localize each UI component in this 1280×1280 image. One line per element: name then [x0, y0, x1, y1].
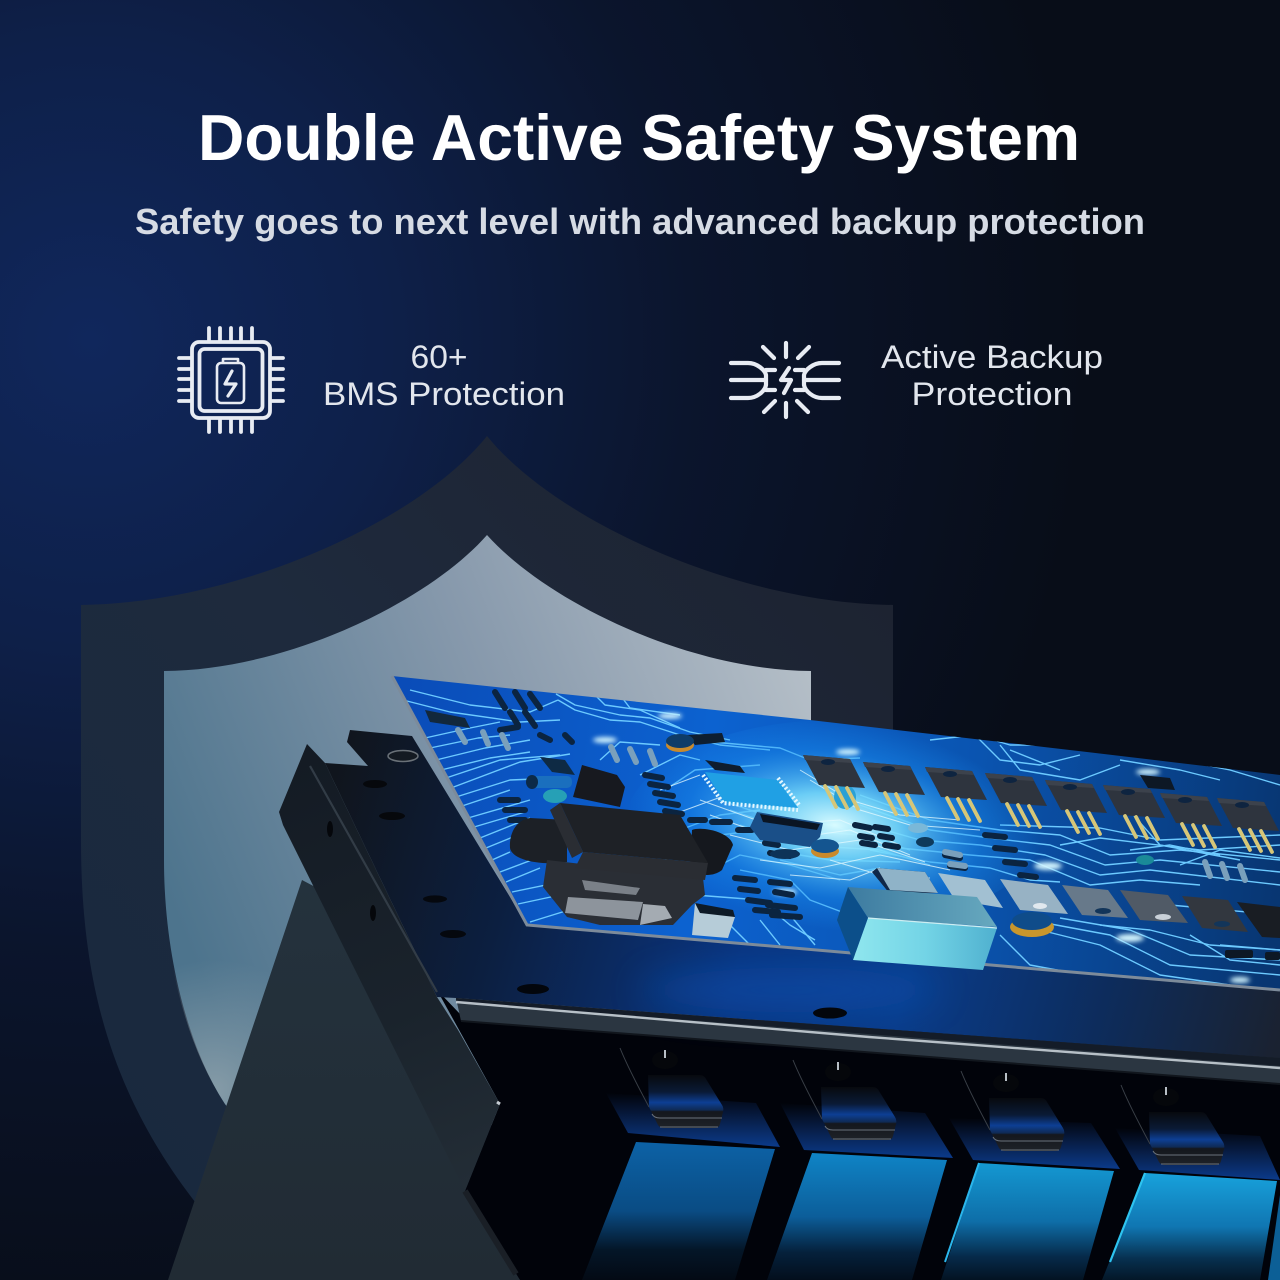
metal latch: [565, 897, 643, 920]
label: 60+ BMS Protection: BMS Protection: [323, 376, 565, 412]
blue capacitor: [526, 775, 572, 789]
white small connector: [692, 903, 735, 938]
rear block: [573, 765, 625, 807]
board traces: [403, 690, 1280, 985]
small right chips: [1140, 775, 1280, 960]
icon: spark between cables: [731, 343, 839, 417]
small dark chips: [495, 692, 1036, 917]
battery interior: [437, 990, 1280, 1280]
battery terminals: [620, 1048, 1224, 1165]
top cover: [560, 803, 708, 863]
title: Double Active Safety System: [198, 101, 1080, 174]
CPU chip: [703, 772, 800, 810]
board edge: [392, 676, 1280, 990]
circuit board: [392, 676, 1280, 990]
battery cell 5 edge: [1268, 1195, 1280, 1280]
top cover front band: [575, 852, 708, 880]
upper dark IC: [687, 733, 725, 745]
feature: BMS protection: [179, 328, 565, 432]
plate glow: [640, 968, 940, 1012]
label: Active Backup Protection: [881, 339, 1103, 412]
green capacitor: [1136, 855, 1154, 865]
battery cell 3: [941, 1118, 1120, 1280]
label: 60+ BMS Protection: 60+: [410, 339, 468, 375]
right cylinder: [690, 829, 733, 875]
icon: chip with battery: [179, 328, 283, 432]
metal bracket top plate: [325, 730, 1280, 1058]
bracket mounting holes: [363, 750, 847, 1018]
teal cap near MOSFETs: [834, 785, 856, 809]
black switch assembly: [510, 765, 733, 925]
triangular stand: [168, 880, 520, 1280]
board base: [392, 676, 1280, 990]
MOSFET row: [803, 755, 1279, 852]
shield: outer: [81, 436, 893, 1280]
central glow: [652, 730, 1028, 919]
large cyan component: [837, 887, 997, 970]
battery cell 4: [1102, 1128, 1280, 1280]
IC above CPU: [705, 760, 745, 773]
battery cell 2: [767, 1103, 953, 1280]
bracket side flange: [279, 744, 516, 1274]
heat-sink tab row: [872, 868, 1280, 938]
feature: active backup protection: [731, 339, 1103, 417]
battery cell 1: [582, 1093, 780, 1280]
bright traces over glow: [660, 770, 980, 880]
gold coil inductors: [666, 734, 1054, 937]
left cylinder: [510, 818, 567, 863]
chip block upper left: [425, 710, 470, 728]
label: Active Backup Protection: Active Backup: [881, 339, 1103, 375]
subtitle: Safety goes to next level with advanced backup protection: [135, 201, 1145, 242]
battery cells: [582, 1048, 1280, 1280]
label: Active Backup Protection: Protection: [912, 376, 1072, 412]
label: 60+ BMS Protection: [323, 339, 565, 412]
small IC: [540, 757, 575, 775]
shield: inner: [164, 535, 811, 1200]
light flares: [593, 713, 1250, 983]
small connector dark pad: [770, 849, 800, 859]
capacitor cylinder: [908, 823, 934, 847]
teal capacitor left: [543, 789, 567, 803]
top cover left bevel: [550, 803, 583, 858]
lower housing: [543, 860, 705, 925]
top resistors: [458, 730, 1245, 880]
front metal strip: [456, 998, 1280, 1084]
connector socket: [750, 812, 823, 847]
